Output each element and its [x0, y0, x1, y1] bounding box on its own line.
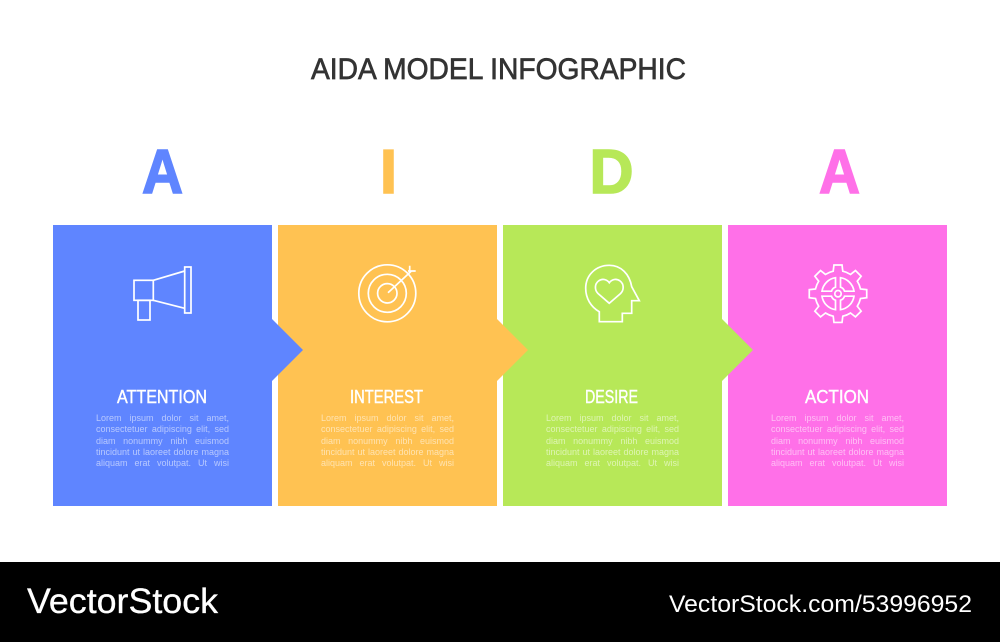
text block: action: diam nonummy nibh euismod	[771, 436, 904, 446]
text block: attention	[96, 413, 229, 468]
title: AIDA MODEL INFOGRAPHIC	[311, 53, 686, 86]
panel: desire	[503, 225, 722, 506]
text block: desire: Lorem ipsum dolor sit amet,	[546, 413, 679, 423]
text block: action: consectetuer adipiscing elit, sed	[771, 424, 904, 434]
footer image id: VectorStock.com/53996952	[669, 591, 972, 618]
letter A for attention: A	[142, 138, 183, 207]
arrow: desire to action	[722, 319, 753, 381]
icon: head with heart	[584, 264, 641, 322]
letter I for interest: I	[380, 138, 397, 207]
text block: action	[771, 413, 904, 468]
text block: attention: consectetuer adipiscing elit, sed	[96, 424, 229, 434]
panel: action	[728, 225, 947, 506]
panel: attention	[53, 225, 272, 506]
icon: megaphone	[133, 266, 192, 321]
text block: interest: tincidunt ut laoreet dolore magna	[321, 447, 454, 457]
arrow: interest to desire	[497, 319, 528, 381]
heading: attention: ATTENTION	[117, 387, 207, 407]
arrow: attention to interest	[272, 319, 303, 381]
text block: interest: consectetuer adipiscing elit, sed	[321, 424, 454, 434]
heading: interest: INTEREST	[350, 387, 423, 407]
text block: interest: diam nonummy nibh euismod	[321, 436, 454, 446]
icon: target with arrow	[358, 264, 417, 323]
panel: interest	[278, 225, 497, 506]
text block: desire: consectetuer adipiscing elit, sed	[546, 424, 679, 434]
letter A for action: A	[819, 138, 860, 207]
heading: action: ACTION	[805, 387, 869, 407]
text block: action: Lorem ipsum dolor sit amet,	[771, 413, 904, 423]
text block: desire: aliquam erat volutpat. Ut wisi	[546, 458, 679, 468]
letter D for desire: D	[590, 138, 634, 207]
heading: desire: DESIRE	[585, 387, 638, 407]
text block: desire: tincidunt ut laoreet dolore magna	[546, 447, 679, 457]
text block: action: tincidunt ut laoreet dolore magna	[771, 447, 904, 457]
text block: attention: aliquam erat volutpat. Ut wisi	[96, 458, 229, 468]
text block: interest: aliquam erat volutpat. Ut wisi	[321, 458, 454, 468]
text block: action: aliquam erat volutpat. Ut wisi	[771, 458, 904, 468]
text block: interest	[321, 413, 454, 468]
footer bar	[0, 562, 1000, 642]
icon: gear	[808, 264, 868, 324]
text block: attention: Lorem ipsum dolor sit amet,	[96, 413, 229, 423]
text block: attention: diam nonummy nibh euismod	[96, 436, 229, 446]
text block: desire	[546, 413, 679, 468]
text block: interest: Lorem ipsum dolor sit amet,	[321, 413, 454, 423]
text block: attention: tincidunt ut laoreet dolore magna	[96, 447, 229, 457]
text block: desire: diam nonummy nibh euismod	[546, 436, 679, 446]
footer logo text: VectorStock	[27, 582, 219, 621]
